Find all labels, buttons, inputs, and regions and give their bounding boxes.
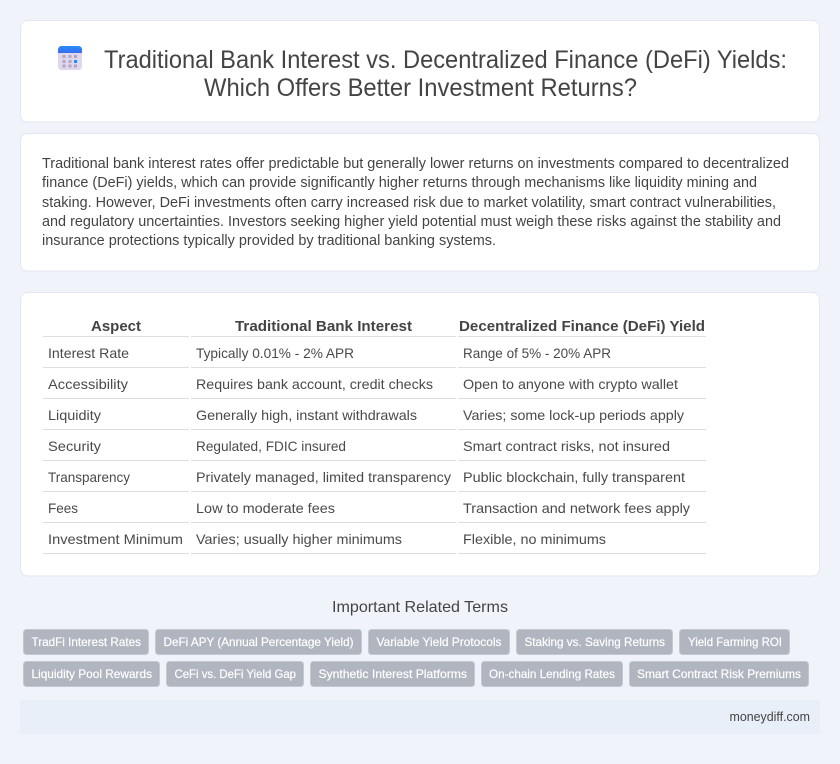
tag: Liquidity Pool Rewards (24, 662, 160, 686)
tag: TradFi Interest Rates (24, 630, 148, 654)
table row: liquidity (43, 407, 706, 430)
table row: security (43, 438, 706, 460)
table row: investment minimum: Investment Minimum (48, 531, 183, 547)
related terms tags (24, 630, 808, 686)
table header row (43, 318, 706, 336)
table row: liquidity: Liquidity (48, 407, 101, 423)
table row: fees: Fees (48, 500, 78, 516)
table row: interest rate: Range of 5% - 20% APR (463, 345, 611, 361)
tag: DeFi APY: DeFi APY (Annual Percentage Yield) (164, 635, 354, 649)
tag: On-chain Lending Rates: On-chain Lending Rates (489, 667, 615, 681)
table row: interest rate (43, 345, 706, 368)
tag: Variable Yield Protocols: Variable Yield Protocols (376, 635, 502, 649)
table row: security: Security (48, 438, 101, 454)
tag: Synthetic Interest Platforms (310, 662, 474, 686)
icon: calendar (58, 46, 82, 70)
table row: fees: Low to moderate fees (196, 500, 335, 516)
footer (20, 700, 820, 734)
tag: CeFi vs. DeFi Yield Gap: CeFi vs. DeFi Yield Gap (174, 667, 296, 681)
table row: liquidity: Generally high, instant withdrawals (196, 407, 417, 423)
footer site name: moneydiff.com (730, 710, 810, 724)
table row: transparency (43, 469, 706, 492)
text block: introduction paragraph: staking. However, DeFi investments often carry increased risk due to market volatility, smart contract vulnerabilities, (42, 195, 776, 211)
tag: Synthetic Interest Platforms: Synthetic Interest Platforms (318, 667, 467, 681)
table row: transparency: Transparency (48, 469, 130, 485)
tag: Staking vs. Saving Returns (516, 630, 672, 654)
tag: Smart Contract Risk Premiums (630, 662, 808, 686)
tag: Smart Contract Risk Premiums: Smart Contract Risk Premiums (637, 667, 801, 681)
table row: accessibility (43, 376, 706, 398)
tag: On-chain Lending Rates (482, 662, 622, 686)
table row: security: Regulated, FDIC insured (196, 438, 346, 454)
heading: important related terms: Important Related Terms (332, 599, 508, 616)
table row: accessibility: Accessibility (48, 376, 128, 392)
tag: Yield Farming ROI: Yield Farming ROI (688, 635, 782, 649)
text block: introduction paragraph: and regulatory uncertainties. Investors seeking higher yield potential must weigh these risks against the stability and (42, 214, 781, 230)
title: Which Offers Better Investment Returns? (204, 74, 637, 102)
title (104, 46, 787, 102)
table row: accessibility: Requires bank account, credit checks (196, 376, 433, 392)
title: Traditional Bank Interest vs. Decentralized Finance (DeFi) Yields: (104, 46, 787, 74)
text block: introduction paragraph: Traditional bank interest rates offer predictable but generally lower returns on investments compared to decentralized (42, 156, 789, 172)
tag: Liquidity Pool Rewards: Liquidity Pool Rewards (32, 667, 152, 681)
table row: fees (43, 500, 706, 522)
text block: introduction paragraph: finance (DeFi) yields, which can provide significantly higher returns through mechanisms like liquidity mining and (42, 175, 757, 191)
text block: introduction paragraph (42, 156, 789, 249)
panel: comparison table (20, 292, 820, 576)
table row: accessibility: Open to anyone with crypto wallet (463, 376, 678, 392)
table row: interest rate: Typically 0.01% - 2% APR (196, 345, 354, 361)
table row: interest rate: Interest Rate (48, 345, 129, 361)
tag: Staking vs. Saving Returns: Staking vs. Saving Returns (524, 635, 665, 649)
panel: title header (20, 20, 820, 122)
tag: Variable Yield Protocols (368, 630, 510, 654)
table row: transparency: Privately managed, limited transparency (196, 469, 451, 485)
table row: security: Smart contract risks, not insured (463, 438, 670, 454)
tag: CeFi vs. DeFi Yield Gap (166, 662, 304, 686)
table header row: Aspect (91, 318, 141, 335)
table row: investment minimum (43, 531, 706, 554)
table row: fees: Transaction and network fees apply (463, 500, 690, 516)
table row: investment minimum: Flexible, no minimums (463, 531, 606, 547)
panel: introduction (20, 134, 820, 271)
tag: Yield Farming ROI (680, 630, 790, 654)
tag: TradFi Interest Rates: TradFi Interest Rates (32, 635, 141, 649)
table header row: Traditional Bank Interest (235, 318, 412, 335)
tag: DeFi APY (156, 630, 362, 654)
text block: introduction paragraph: insurance protections typically provided by traditional banking systems. (42, 233, 496, 249)
table row: transparency: Public blockchain, fully transparent (463, 469, 685, 485)
table row: liquidity: Varies; some lock-up periods apply (463, 407, 684, 423)
table row: investment minimum: Varies; usually higher minimums (196, 531, 402, 547)
table header row: Decentralized Finance (DeFi) Yield (459, 318, 705, 335)
